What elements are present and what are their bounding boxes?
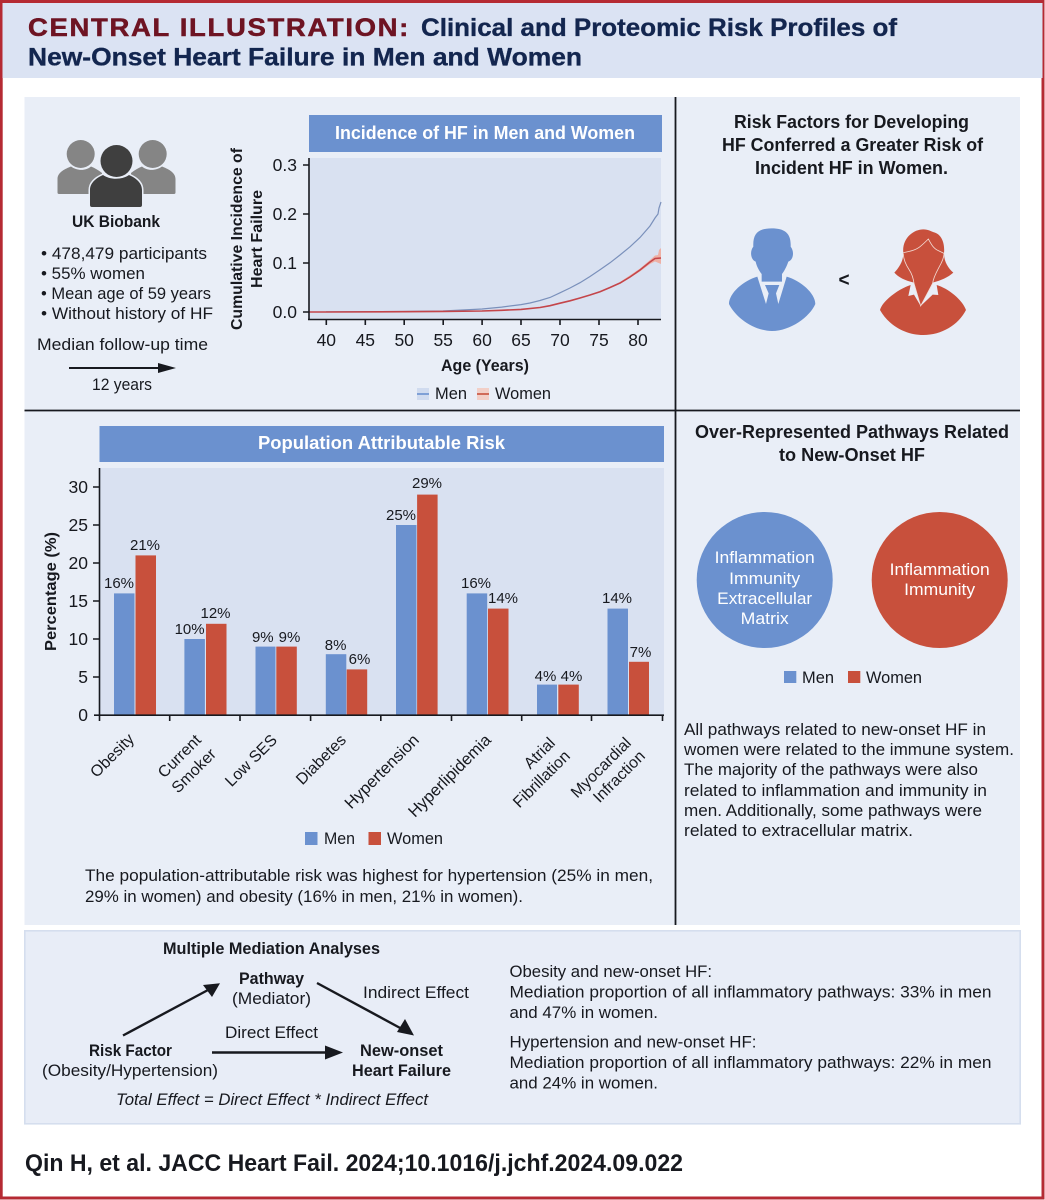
- y tick labels: 0.0: [273, 302, 297, 322]
- value labels: 16%: [104, 575, 134, 592]
- heading: HF Conferred a Greater Risk of: [722, 134, 984, 155]
- pathway description: [683, 721, 1014, 840]
- node: new-onset heart failure: [352, 1042, 451, 1080]
- circle: men pathways: [697, 512, 833, 648]
- y tick labels: 15: [69, 591, 88, 611]
- heading: [695, 421, 1009, 465]
- node: pathway: Pathway: [239, 970, 305, 988]
- category labels: Atrial: [521, 735, 559, 773]
- x axis title: Age (Years): [441, 356, 529, 375]
- line chart: cumulative incidence: [309, 202, 661, 312]
- mediation results: hypertension: [510, 1034, 992, 1092]
- value labels: 8%: [325, 637, 346, 654]
- pathway description: related to extracellular matrix.: [684, 822, 913, 840]
- value labels: 21%: [130, 537, 160, 554]
- x tick labels: 40: [317, 330, 336, 350]
- plot area: [309, 158, 661, 318]
- value labels: 12%: [200, 605, 231, 622]
- category labels: Smoker: [169, 745, 220, 797]
- plot area: [100, 468, 664, 715]
- legend: Men: [435, 385, 467, 403]
- panel: study population: [37, 140, 213, 394]
- x tick labels: 50: [394, 330, 414, 350]
- circle: men pathways: Immunity: [729, 570, 801, 588]
- y tick labels: 30: [69, 477, 88, 497]
- x tick labels: 65: [511, 330, 531, 350]
- main panel background: [24, 97, 1020, 925]
- pathway description: men. Additionally, some pathways were: [684, 802, 982, 820]
- node: pathway: [232, 970, 311, 1008]
- y tick labels: 0: [78, 705, 88, 725]
- legend: Women: [495, 385, 551, 403]
- label: median follow-up: Median follow-up time: [37, 336, 208, 354]
- arrow: risk factor to pathway: [123, 983, 220, 1036]
- bar chart: [104, 475, 651, 715]
- heading: to New-Onset HF: [779, 444, 925, 465]
- y tick labels: 0.2: [273, 204, 297, 224]
- legend: [784, 669, 922, 687]
- y tick labels: 5: [78, 667, 88, 687]
- chart heading: [309, 115, 662, 152]
- arrow: direct effect: [212, 1046, 343, 1060]
- legend: Women: [866, 669, 922, 687]
- value labels: 4%: [561, 668, 582, 685]
- mediation results: hypertension: Hypertension and new-onset HF:: [510, 1034, 756, 1052]
- category labels: Low SES: [222, 732, 281, 790]
- icon: people group: [58, 140, 176, 207]
- chart heading: Population Attributable Risk: [258, 432, 506, 453]
- y axis title: [229, 147, 266, 330]
- x tick labels: 60: [472, 330, 492, 350]
- panel: population attributable risk: [43, 426, 664, 906]
- value labels: 9%: [252, 629, 274, 646]
- legend: Men: [802, 669, 834, 687]
- value labels: 16%: [461, 575, 491, 592]
- legend: Men: [324, 830, 355, 848]
- panel: risk factors by sex: [722, 111, 984, 335]
- bars: women: [136, 495, 649, 715]
- legend: [417, 385, 551, 403]
- pathway description: The majority of the pathways were also: [684, 761, 978, 779]
- circle: women pathways: Immunity: [904, 581, 976, 599]
- panel: over-represented pathways: [683, 421, 1014, 840]
- node: risk factor: (Obesity/Hypertension): [42, 1062, 218, 1080]
- value labels: 25%: [386, 507, 416, 524]
- node: new-onset heart failure: Heart Failure: [352, 1062, 451, 1080]
- category labels: Obesity: [87, 731, 138, 781]
- pathway description: All pathways related to new-onset HF in: [684, 721, 986, 739]
- x tick labels: 45: [356, 330, 375, 350]
- arrow: pathway to heart failure: [317, 983, 414, 1036]
- category labels: Infraction: [590, 748, 649, 806]
- icon: woman: [880, 229, 966, 335]
- pathway description: women were related to the immune system.: [683, 741, 1014, 759]
- pathway description: related to inflammation and immunity in: [684, 782, 987, 800]
- mediation results: obesity: Mediation proportion of all inflammatory pathways: 33% in men: [510, 984, 992, 1002]
- legend: Women: [387, 830, 443, 848]
- formula: Total Effect = Direct Effect * Indirect Effect: [116, 1091, 429, 1109]
- value labels: 14%: [602, 590, 632, 607]
- study facts list: • 55% women: [41, 265, 145, 283]
- x tick labels: [317, 330, 648, 350]
- category labels: [87, 731, 649, 821]
- heading: Over-Represented Pathways Related: [695, 421, 1009, 442]
- panel: multiple mediation analyses: [25, 931, 1020, 1124]
- icon: man: [729, 228, 815, 331]
- node: pathway: (Mediator): [232, 990, 311, 1008]
- y tick labels: 0.3: [273, 155, 297, 175]
- chart heading: Incidence of HF in Men and Women: [335, 122, 635, 143]
- mediation results: hypertension: Mediation proportion of all inflammatory pathways: 22% in men: [510, 1054, 992, 1072]
- axes: [93, 468, 664, 721]
- title: central illustration label: CENTRAL ILLUSTRATION:: [28, 14, 410, 42]
- heading: Multiple Mediation Analyses: [163, 940, 380, 958]
- node: risk factor: Risk Factor: [89, 1042, 173, 1060]
- mediation results: hypertension: and 24% in women.: [510, 1074, 658, 1092]
- x tick labels: 70: [550, 330, 570, 350]
- title: line two: New-Onset Heart Failure in Men and Women: [28, 44, 582, 72]
- heading: Risk Factors for Developing: [734, 111, 969, 132]
- y tick labels: 25: [69, 515, 88, 535]
- y tick labels: [273, 155, 297, 322]
- value labels: 29%: [412, 475, 442, 492]
- label: direct effect: Direct Effect: [225, 1024, 318, 1042]
- category labels: Hypertension: [341, 731, 423, 813]
- value labels: 14%: [488, 590, 518, 607]
- mediation results: obesity: [510, 963, 992, 1022]
- mediation results: obesity: and 47% in women.: [510, 1004, 658, 1022]
- y axis title: Heart Failure: [249, 190, 266, 288]
- y tick labels: [69, 477, 88, 725]
- y axis title: Percentage (%): [43, 532, 60, 651]
- mediation results: obesity: Obesity and new-onset HF:: [510, 963, 712, 981]
- circle: women pathways: Inflammation: [890, 561, 990, 579]
- title: line one: Clinical and Proteomic Risk Profiles of: [421, 14, 898, 42]
- node: risk factor: [42, 1042, 218, 1080]
- category labels: Fibrillation: [510, 748, 574, 811]
- value labels: 10%: [175, 621, 205, 638]
- y tick labels: 20: [69, 553, 88, 573]
- summary text: 29% in women) and obesity (16% in men, 21% in women).: [85, 888, 523, 906]
- category labels: Diabetes: [293, 732, 350, 788]
- bars: men: [114, 525, 628, 715]
- category labels: Myocardial: [568, 735, 635, 802]
- study facts list: • Without history of HF: [41, 305, 213, 323]
- summary text: [85, 867, 653, 906]
- circle: men pathways: Extracellular: [717, 590, 813, 608]
- panel divider lines: [24, 97, 1020, 925]
- label: 12 years: 12 years: [92, 376, 152, 394]
- circle: women pathways: [872, 512, 1008, 648]
- value labels: 6%: [349, 651, 370, 668]
- axes: [303, 158, 661, 325]
- y tick labels: 0.1: [273, 253, 297, 273]
- value labels: 9%: [279, 629, 300, 646]
- study facts list: • Mean age of 59 years: [41, 285, 211, 303]
- label: indirect effect: Indirect Effect: [363, 984, 469, 1002]
- heading: [722, 111, 984, 178]
- summary text: The population-attributable risk was highest for hypertension (25% in men,: [85, 867, 653, 885]
- legend: [305, 830, 443, 848]
- arrow: follow-up: [69, 363, 176, 373]
- x tick labels: 80: [628, 330, 648, 350]
- symbol: less than: <: [838, 270, 850, 291]
- y axis title: Cumulative Incidence of: [229, 147, 246, 330]
- heading: UK Biobank: UK Biobank: [72, 212, 160, 231]
- chart heading: [100, 426, 664, 462]
- x tick labels: 75: [589, 330, 609, 350]
- heading: Incident HF in Women.: [755, 157, 948, 178]
- circle: men pathways: Inflammation: [715, 549, 815, 567]
- node: new-onset heart failure: New-onset: [360, 1042, 443, 1060]
- panel: incidence chart: [229, 115, 662, 403]
- category labels: Current: [155, 731, 205, 782]
- value labels: 7%: [630, 644, 651, 661]
- title banner: [2, 3, 1042, 78]
- category labels: Hyperlipidemia: [405, 731, 495, 821]
- study facts list: • 478,479 participants: [41, 245, 207, 263]
- citation: Qin H, et al. JACC Heart Fail. 2024;10.1016/j.jchf.2024.09.022: [25, 1150, 683, 1177]
- value labels: 4%: [535, 668, 556, 685]
- value labels: [104, 475, 651, 685]
- x tick labels: 55: [433, 330, 453, 350]
- y tick labels: 10: [69, 629, 88, 649]
- study facts list: [41, 245, 213, 323]
- circle: men pathways: Matrix: [741, 610, 789, 628]
